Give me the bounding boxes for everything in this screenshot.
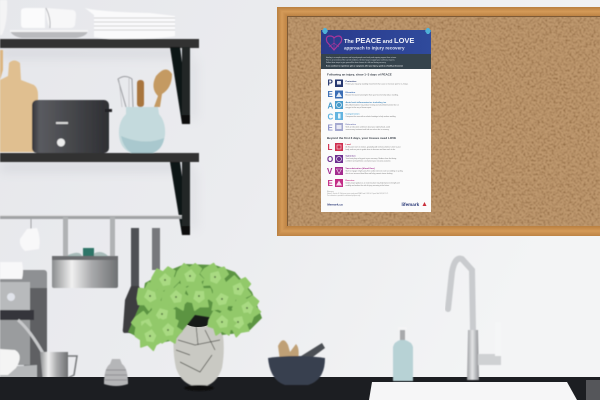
O: Optimism: Your brain plays a big part in your recovery. Studies show that being — [346, 157, 396, 160]
poster intro band: Healing is a complex process and injured people need early and ongoing support from a team. — [326, 56, 397, 59]
E: Elevation: Elevation — [346, 91, 356, 94]
fine print — [327, 191, 389, 197]
mortar and pestle with ginger — [268, 340, 325, 385]
P: Protection: Protection — [346, 80, 357, 83]
E: Exercise: mobility and reduce the risk of injury recurring in the future. — [346, 184, 390, 187]
V: Vascularisation: Start to engage in light, pain-free cardio exercises such as walking or cycling, — [346, 170, 404, 172]
O: Optimism — [327, 154, 396, 164]
C: Compression: C — [328, 112, 334, 122]
E: Elevation — [328, 90, 399, 99]
E: Exercise: Under proper guidance, an exercise plan may help improve strength and — [346, 182, 400, 184]
footer website: lifemark.ca — [327, 202, 343, 206]
fine print: This information is provided for educational purposes only. — [327, 194, 361, 197]
vase — [174, 322, 224, 391]
poster intro band — [321, 54, 431, 69]
V: Vascularisation: Vascularisation (blood flow) — [346, 167, 375, 170]
A: Avoid anti-inflammatories: A — [328, 102, 334, 110]
sink faucet — [448, 259, 501, 380]
A: Avoid anti-inflammatories: Avoid anti-inflammatories including ice — [346, 101, 387, 104]
countertop — [0, 377, 600, 400]
E: Exercise: E — [328, 179, 334, 188]
A: Avoid anti-inflammatories: Anti-inflammatories may reduce healing and anti-inflammatories like ice — [346, 104, 399, 106]
hanging rail with utensils — [0, 215, 182, 333]
P: Protection: P — [328, 78, 334, 88]
poster: PEACE and LOVE — [321, 30, 431, 212]
P: Protection: Protect your injury by avoiding movements that cause or increase pain for 1–3 days. — [346, 82, 409, 86]
poster header: The PEACE and LOVE — [344, 36, 414, 45]
L: Load — [328, 143, 401, 152]
V: Vascularisation — [327, 167, 404, 176]
L: Load: Load — [346, 144, 351, 146]
small striped canister — [104, 359, 128, 386]
poster header: approach to injury recovery — [344, 46, 405, 50]
poster header — [321, 30, 431, 54]
C: Compression: Compression — [346, 114, 360, 116]
C: Compression — [328, 112, 397, 122]
fine print: References: — [327, 191, 335, 193]
V: Vascularisation: V — [327, 167, 333, 176]
wall shadows — [0, 48, 196, 230]
A: Avoid anti-inflammatories — [328, 101, 399, 110]
E: Education — [328, 123, 390, 132]
LOVE list — [327, 143, 404, 188]
PEACE heading: Following an injury, show 1–3 days of PEACE — [327, 72, 392, 76]
A: Avoid anti-inflammatories: may get in the way of tissue repair. — [346, 106, 372, 109]
LOVE heading: Beyond the first 3 days, your tissues need LOVE — [327, 136, 396, 140]
white sink — [369, 382, 577, 400]
poster intro band: If you continue to experience pain or symptoms after your injury, speak to a health professional. — [326, 64, 404, 68]
drying mat — [586, 380, 600, 400]
icon: peace heart — [326, 36, 342, 50]
O: Optimism: O — [327, 155, 333, 164]
fine print: Dubois B, Esculier JF. Soft-tissue injuries simply need PEACE and LOVE. Br J Sports Med 2020;54:72–73. — [327, 192, 389, 195]
PEACE list — [328, 78, 409, 132]
L: Load: As the pain starts to reduce, gradually add normal activities. Listen to your — [346, 146, 401, 148]
O: Optimism: confident and optimistic can improve your recovery outcome. — [346, 160, 391, 162]
E: Education: Education — [346, 123, 357, 126]
poster intro band: Follow these steps to give yourself the best chance of a full and lasting recovery. — [326, 61, 387, 64]
foliage — [128, 259, 263, 352]
poster intro band: Here is an overview of the current evidence, the best way to support your soft tissue injuries. — [326, 58, 395, 62]
C: Compression: Compress the area with an elastic bandage to help reduce swelling. — [346, 115, 397, 118]
L: Load: L — [328, 143, 332, 152]
middle shelf with cutting board, toaster and jar — [0, 50, 199, 235]
E: Elevation: E — [328, 90, 334, 99]
E: Education: Seek an education and learn about your optimal load, avoid — [346, 126, 390, 128]
corkboard — [277, 7, 600, 236]
top shelf with dishes — [0, 0, 199, 124]
E: Exercise: Exercise — [346, 180, 355, 182]
E: Education: unnecessary treatment and take an active role in recovery. — [346, 128, 390, 131]
potted plant — [128, 259, 263, 391]
E: Education: E — [328, 124, 334, 132]
espresso machine — [0, 262, 77, 394]
soap dispenser — [393, 327, 413, 381]
L: Load: body, and use pain to guide when to do more and how much to do. — [346, 148, 396, 151]
O: Optimism: Optimism — [346, 154, 356, 158]
V: Vascularisation: which can increase blood flow and help promote tissue healing. — [346, 172, 393, 175]
E: Elevation: Elevate the injured area higher than your heart to help reduce swelling. — [346, 94, 399, 96]
P: Protection — [328, 78, 409, 88]
poster pins — [322, 28, 431, 34]
footer logo: lifemark — [402, 202, 420, 207]
E: Exercise — [328, 179, 400, 188]
